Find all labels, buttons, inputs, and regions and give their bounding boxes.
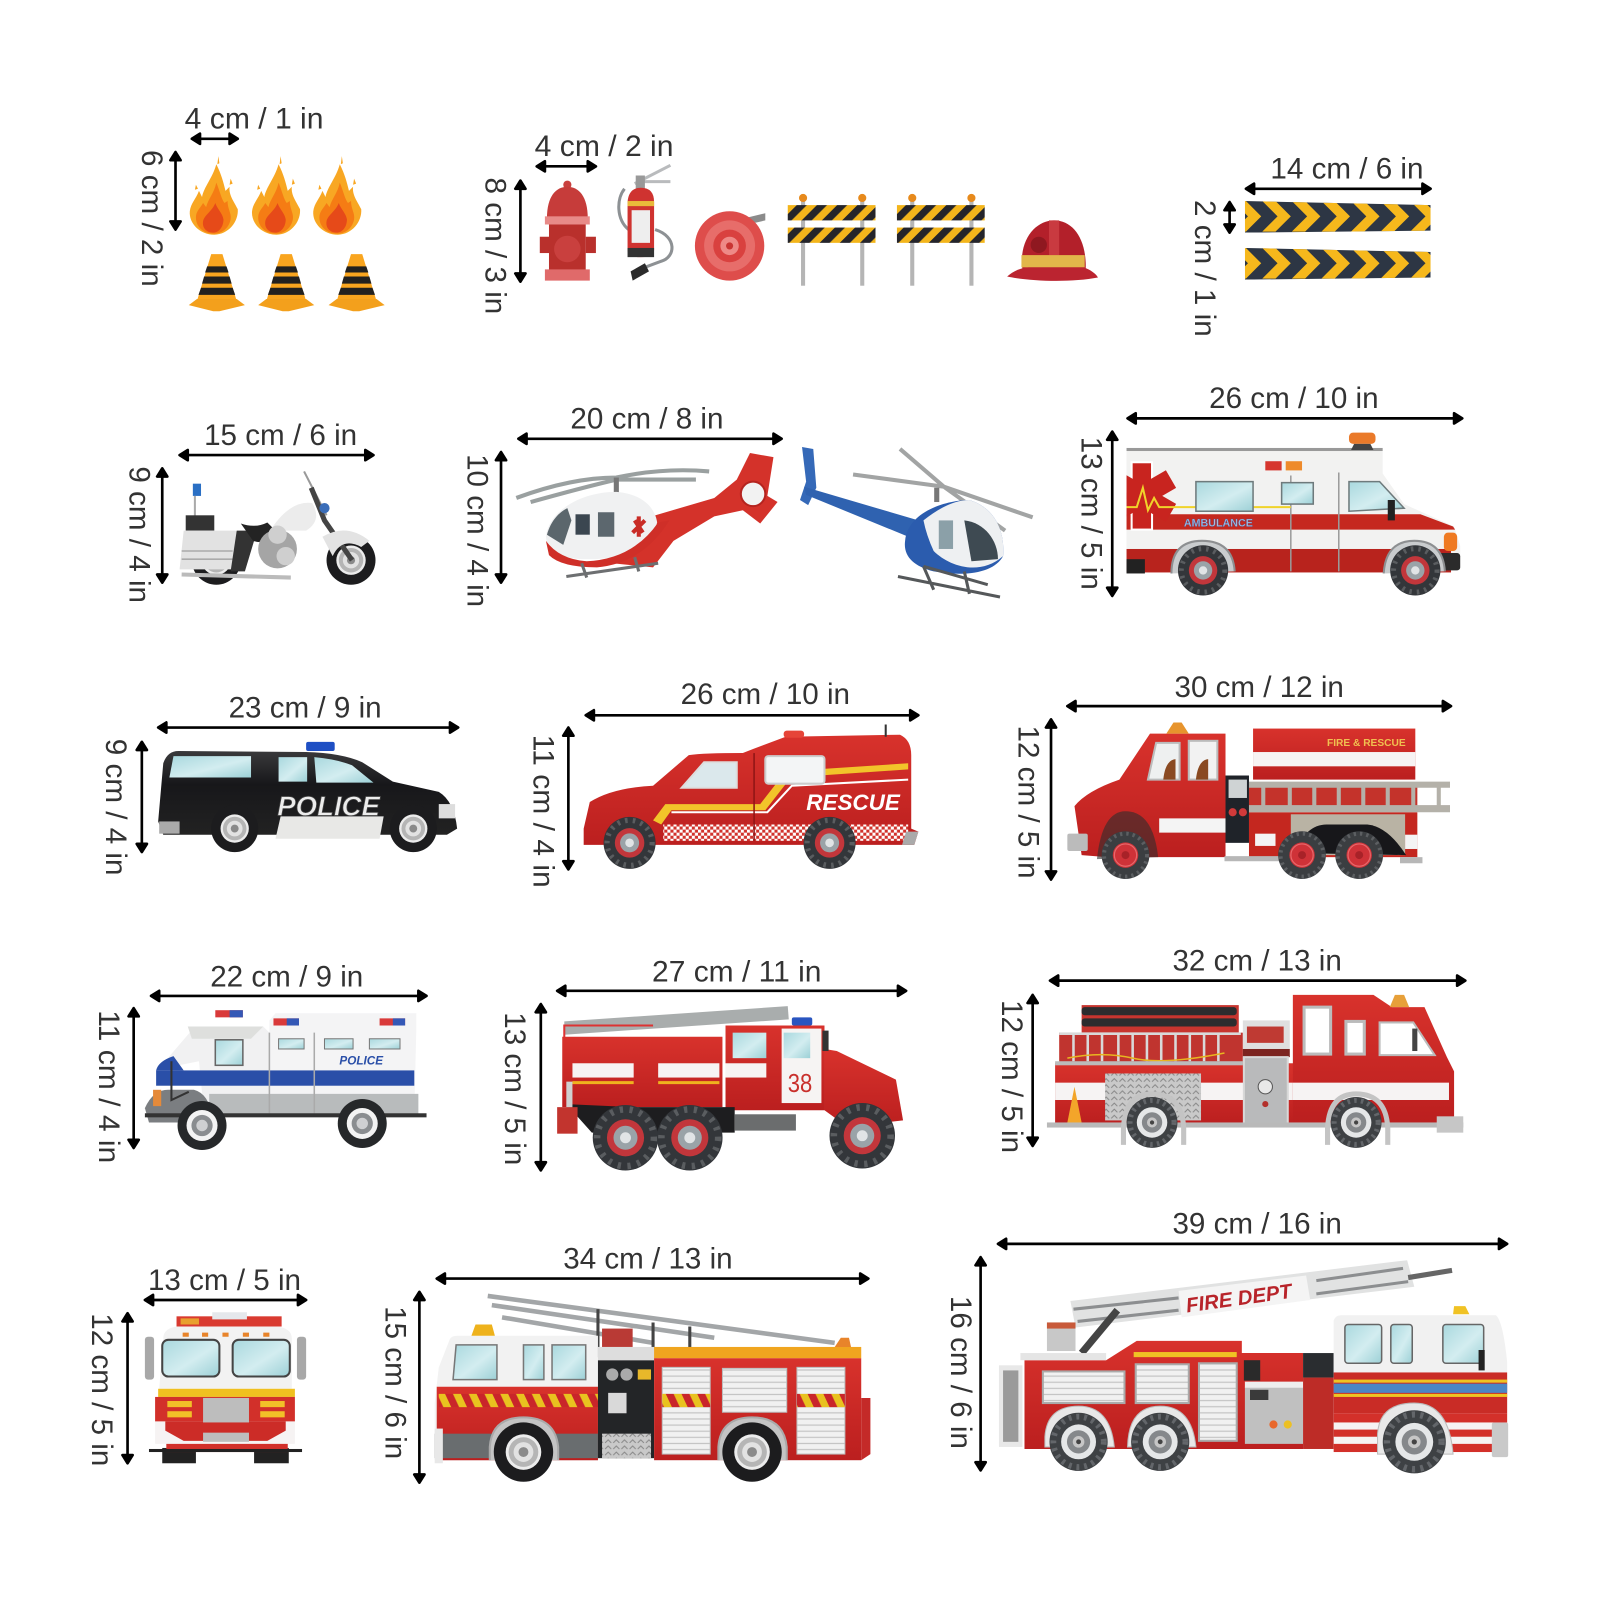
- vehicle: aerial ladder fire truck: [999, 1260, 1508, 1473]
- vehicle: ladder fire truck: [435, 1296, 870, 1482]
- vehicle: blue police helicopter: [800, 447, 1033, 597]
- chevron tape 2: [1233, 248, 1439, 280]
- panel: ladder fire truck: [379, 1242, 870, 1483]
- panel: pumper fire engine: [995, 944, 1465, 1153]
- height arrow: [129, 1008, 139, 1148]
- vehicle: blue police helicopter: POLICE: [871, 493, 899, 509]
- chevron tape 1: [1233, 201, 1439, 233]
- height arrow: [414, 1292, 424, 1483]
- icon: barrier: [897, 194, 985, 286]
- height arrow: [976, 1257, 986, 1470]
- icon: hose: [695, 211, 765, 281]
- vehicle: fire truck 38: 38: [788, 1070, 812, 1098]
- width label: 4 cm / 2 in: [535, 130, 673, 163]
- width label: 30 cm / 12 in: [1174, 671, 1344, 704]
- vehicle: armored police van: POLICE: [339, 1054, 384, 1067]
- height arrow: [536, 1004, 546, 1170]
- height label: 2 cm / 1 in: [1188, 200, 1221, 337]
- vehicle: fire truck 38: [557, 1006, 903, 1171]
- vehicle: front view fire truck: [145, 1312, 306, 1463]
- panel: armored police van: [92, 961, 427, 1163]
- width arrow: [1050, 976, 1465, 986]
- height label: 6 cm / 2 in: [135, 150, 168, 287]
- panel: chevron tapes: [1188, 153, 1439, 337]
- height arrow: [1046, 719, 1056, 880]
- height label: 9 cm / 4 in: [99, 739, 132, 876]
- panel: fire equipment: [479, 130, 1098, 314]
- width arrow: [518, 434, 782, 444]
- vehicle: armored police van: [145, 1010, 427, 1150]
- width arrow: [192, 134, 238, 144]
- width label: 13 cm / 5 in: [148, 1264, 301, 1297]
- vehicle: ambulance: AMBULANCE: [1184, 518, 1253, 530]
- icon: cones: [189, 254, 385, 311]
- width arrow: [1128, 413, 1462, 423]
- panel: helicopters: [460, 403, 1033, 607]
- height label: 11 cm / 4 in: [92, 1010, 125, 1163]
- width label: 14 cm / 6 in: [1270, 153, 1423, 186]
- height label: 8 cm / 3 in: [479, 178, 512, 314]
- icon: helmet: [1007, 220, 1098, 281]
- height label: 13 cm / 5 in: [1075, 437, 1108, 590]
- width label: 39 cm / 16 in: [1172, 1208, 1342, 1241]
- width arrow: [151, 991, 427, 1001]
- panel: rescue truck: [527, 678, 918, 888]
- height arrow: [122, 1313, 133, 1463]
- width arrow: [180, 450, 373, 460]
- vehicle: pumper fire engine: [1047, 995, 1463, 1148]
- width label: 20 cm / 8 in: [570, 403, 723, 436]
- height label: 10 cm / 4 in: [460, 454, 493, 607]
- width arrow: [1246, 184, 1431, 194]
- panel: flames and cones: [135, 103, 385, 311]
- width label: 23 cm / 9 in: [229, 691, 382, 724]
- panel: tanker fire truck: [1011, 671, 1451, 880]
- vehicle: rescue truck: [584, 724, 918, 869]
- width label: 26 cm / 10 in: [1209, 382, 1379, 415]
- panel: police SUV: [99, 691, 458, 876]
- height arrow: [1028, 995, 1038, 1146]
- height label: 15 cm / 6 in: [379, 1306, 412, 1459]
- icon: barrier: [788, 194, 876, 286]
- height label: 12 cm / 5 in: [85, 1313, 118, 1466]
- width arrow: [537, 161, 596, 171]
- height label: 12 cm / 5 in: [1011, 726, 1044, 879]
- width label: 22 cm / 9 in: [210, 961, 363, 994]
- width arrow: [1067, 701, 1451, 711]
- height arrow: [137, 742, 147, 852]
- panel: front view fire truck: [85, 1264, 306, 1466]
- vehicle: police SUV: POLICE: [277, 790, 381, 821]
- vehicle: motorcycle: [180, 471, 376, 585]
- height label: 13 cm / 5 in: [498, 1012, 531, 1165]
- width arrow: [586, 710, 918, 720]
- height arrow: [515, 181, 526, 282]
- width arrow: [998, 1239, 1507, 1249]
- panel: fire truck 38: [498, 956, 906, 1171]
- width label: 26 cm / 10 in: [681, 678, 850, 711]
- vehicle: police SUV: [158, 742, 457, 852]
- width label: 34 cm / 13 in: [563, 1242, 733, 1275]
- icon: hydrant: [540, 181, 596, 281]
- panel: aerial ladder fire truck: [944, 1208, 1508, 1473]
- vehicle: tanker fire truck: FIRE & RESCUE: [1327, 738, 1406, 749]
- vehicle: red medical helicopter: [516, 453, 778, 578]
- width label: 27 cm / 11 in: [652, 956, 821, 989]
- height label: 16 cm / 6 in: [944, 1296, 977, 1449]
- height arrow: [1107, 432, 1117, 596]
- width arrow: [437, 1273, 868, 1284]
- icon: flames: [190, 156, 361, 235]
- width label: 15 cm / 6 in: [204, 419, 357, 452]
- width label: 32 cm / 13 in: [1172, 944, 1342, 977]
- panel: ambulance: [1075, 382, 1462, 596]
- height arrow: [496, 452, 506, 583]
- height arrow: [170, 152, 181, 230]
- vehicle: ambulance: [1108, 433, 1460, 596]
- width arrow: [145, 1295, 306, 1305]
- vehicle: tanker fire truck: [1067, 722, 1450, 879]
- icon: extinguisher: [619, 165, 672, 281]
- vehicle: aerial ladder fire truck: FIRE DEPT: [1185, 1281, 1295, 1317]
- panel: motorcycle: [123, 419, 376, 603]
- width arrow: [158, 722, 458, 733]
- height arrow: [563, 728, 573, 869]
- width label: 4 cm / 1 in: [185, 103, 323, 136]
- height arrow: [1224, 202, 1235, 233]
- height label: 12 cm / 5 in: [995, 1000, 1028, 1153]
- width arrow: [557, 986, 906, 996]
- height label: 11 cm / 4 in: [527, 735, 560, 888]
- height arrow: [157, 468, 167, 583]
- height label: 9 cm / 4 in: [123, 466, 156, 603]
- vehicle: rescue truck: RESCUE: [806, 790, 901, 815]
